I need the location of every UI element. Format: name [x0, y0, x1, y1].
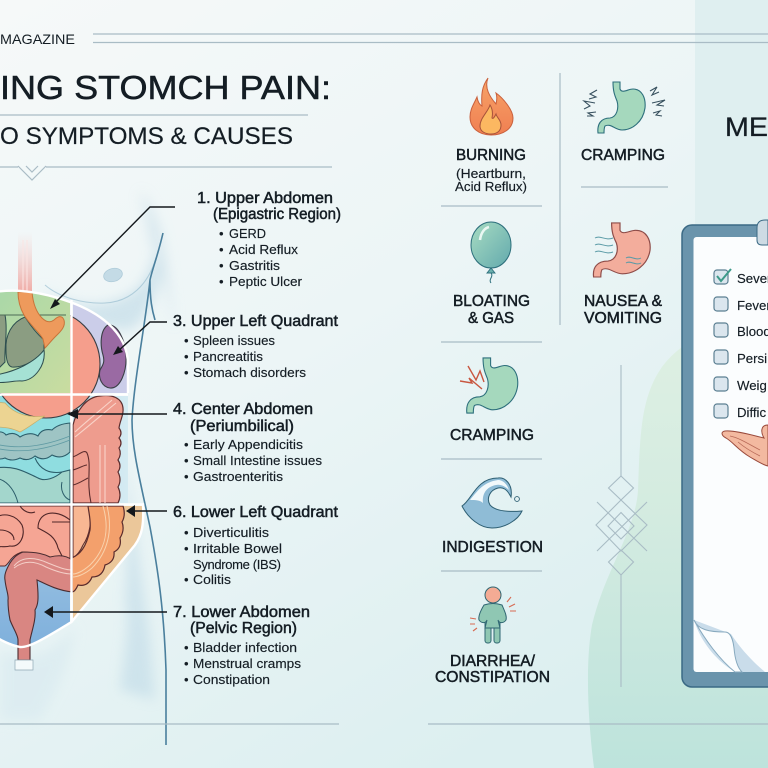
checklist: Weig: [737, 378, 767, 393]
magazine label: MAGAZINE: [0, 31, 75, 47]
symptom: indigestion: INDIGESTION: [442, 539, 543, 556]
green background blob: [588, 320, 768, 768]
callout: center abdomen: [173, 401, 322, 484]
header rule lines: [93, 34, 768, 42]
callout: lower abdomen: Menstrual cramps: [193, 656, 302, 671]
callout: lower abdomen: •: [184, 672, 189, 687]
icon: flame: [470, 78, 513, 135]
callout: lower left quadrant: Colitis: [193, 572, 232, 587]
callout: upper abdomen: •: [219, 226, 224, 241]
icon: red lightning: [460, 366, 484, 389]
icon: stomach teal: [598, 82, 645, 133]
colon center: [73, 396, 123, 503]
callout: lower abdomen: •: [184, 640, 189, 655]
arrow: lower abdomen: [44, 606, 167, 618]
callout: lower left quadrant: 6. Lower Left Quadrant: [173, 504, 339, 521]
callout: lower abdomen: [173, 604, 310, 687]
callout: upper abdomen: (Epigastric Region): [213, 206, 341, 223]
icon: person: [470, 587, 516, 643]
symptom: bloating: [453, 222, 530, 327]
small intestine lower: [0, 506, 70, 566]
arrow: upper left quadrant: [113, 322, 167, 355]
callout: upper abdomen: •: [219, 258, 224, 273]
symptom: bloating: & GAS: [468, 310, 514, 327]
pancreas: [0, 402, 45, 432]
icon: stomach with red spark: [467, 358, 518, 413]
page curl: [694, 620, 765, 672]
callout: center abdomen: Small Intestine issues: [193, 453, 322, 468]
callout: lower abdomen: (Pelvic Region): [190, 620, 297, 637]
heading: medical: ME: [725, 112, 768, 142]
region dividers: [0, 291, 143, 647]
body outline: [132, 233, 166, 745]
icon: stomach pink: [593, 223, 650, 277]
symptom: cramping: CRAMPING: [450, 427, 534, 444]
bladder: [15, 660, 33, 670]
region: center right: [73, 396, 128, 503]
rectum and sigmoid: [5, 552, 72, 660]
icon: pain sparks: [584, 87, 665, 116]
callout: lower abdomen: Bladder infection: [193, 640, 297, 655]
callout: lower abdomen: 7. Lower Abdomen: [173, 604, 310, 621]
nipple: [102, 266, 124, 284]
callout: center abdomen: (Periumbilical): [190, 418, 294, 435]
spleen: [99, 325, 126, 388]
callout: lower abdomen: Constipation: [193, 672, 270, 687]
callout: center abdomen: 4. Center Abdomen: [173, 401, 313, 418]
colon lower: [72, 506, 124, 592]
callout: upper left quadrant: 3. Upper Left Quadrant: [173, 313, 339, 330]
symptom: cramping: [450, 358, 534, 444]
callout: upper abdomen: GERD: [229, 226, 266, 241]
symptom: diarrhea and constipation: DIARRHEA/: [450, 653, 536, 670]
symptom: nausea: [584, 223, 663, 327]
callout: upper left quadrant: •: [184, 365, 189, 380]
checklist: Persi: [737, 351, 767, 366]
arrow: lower left quadrant: [126, 505, 167, 517]
title rule: [0, 114, 308, 116]
checklist: [714, 269, 768, 420]
symptom: indigestion: [442, 478, 543, 556]
callout: upper abdomen: •: [219, 274, 224, 289]
callout: upper left quadrant: •: [184, 333, 189, 348]
callout: center abdomen: •: [184, 469, 189, 484]
symptom: bloating: BLOATING: [453, 293, 530, 310]
callout: lower left quadrant: •: [184, 541, 189, 556]
subtitle: O SYMPTOMS & CAUSES: [0, 123, 293, 150]
callout: upper left quadrant: •: [184, 349, 189, 364]
bottom rules: [0, 723, 768, 725]
callout: lower left quadrant: •: [184, 525, 189, 540]
callout: upper left quadrant: Spleen issues: [193, 333, 275, 348]
callout: center abdomen: •: [184, 437, 189, 452]
callout: upper abdomen: Acid Reflux: [229, 242, 299, 257]
checkmark: [717, 269, 731, 281]
callout: center abdomen: •: [184, 453, 189, 468]
lower esophagus and stomach inlet: [18, 292, 64, 348]
callout: upper abdomen: [197, 190, 341, 289]
arrow: upper abdomen: [50, 207, 175, 309]
callout: lower abdomen: •: [184, 656, 189, 671]
symptom: cramping with sparks: [581, 82, 665, 164]
icon: wave: [462, 478, 522, 528]
symptom: cramping with sparks: CRAMPING: [581, 147, 665, 164]
callout: upper abdomen: Peptic Ulcer: [229, 274, 303, 289]
callout: upper abdomen: Gastritis: [229, 258, 281, 273]
symptom: burning: [455, 78, 527, 194]
clipboard paper: [694, 237, 768, 672]
chest contour: [45, 258, 156, 303]
callout: upper abdomen: •: [219, 242, 224, 257]
callout: upper abdomen: 1. Upper Abdomen: [197, 190, 333, 207]
region: lower abdomen: [0, 506, 70, 647]
callout: center abdomen: Gastroenteritis: [193, 469, 284, 484]
callout: upper left quadrant: Stomach disorders: [193, 365, 307, 380]
symptom dividers: [441, 73, 668, 571]
region: lower left quadrant: [73, 506, 143, 621]
callout: center abdomen: Early Appendicitis: [193, 437, 304, 452]
callout: upper left quadrant: [173, 313, 339, 380]
region: upper left quadrant: [73, 303, 128, 393]
callout: lower left quadrant: Syndrome (IBS): [193, 557, 281, 572]
decorative divider with diamonds: [596, 365, 647, 687]
callout: lower left quadrant: •: [184, 572, 189, 587]
clipboard: [682, 220, 768, 687]
torso shading: [0, 190, 175, 720]
arrow: center abdomen: [67, 409, 167, 419]
liver: [0, 315, 66, 383]
callout: lower left quadrant: Irritable Bowel: [193, 541, 282, 556]
right tinted panel: [695, 0, 768, 768]
symptom: nausea: VOMITING: [584, 310, 662, 327]
small intestine center: [0, 423, 70, 503]
anatomy illustration: [0, 190, 175, 745]
icon: balloon: [471, 222, 511, 283]
checkbox checked: [714, 270, 728, 284]
region: center left: [0, 396, 70, 503]
clipboard clip: [757, 220, 768, 245]
callout: upper left quadrant: Pancreatitis: [193, 349, 264, 364]
symptom: burning: (Heartburn,: [456, 166, 526, 181]
icon: nausea waves: [595, 237, 641, 264]
region: upper abdomen: [0, 291, 70, 393]
clipboard frame: [682, 225, 768, 687]
symptom: diarrhea and constipation: [435, 587, 550, 686]
symptom: burning: Acid Reflux): [455, 179, 527, 194]
symptom: nausea: NAUSEA &: [584, 293, 663, 310]
icon: hand: [722, 425, 768, 466]
checklist: Diffic: [737, 405, 766, 420]
callout: lower left quadrant: [173, 504, 339, 587]
title: ING STOMCH PAIN:: [0, 69, 331, 106]
esophagus: [18, 232, 32, 294]
symptom: burning: BURNING: [456, 147, 526, 164]
callout: lower left quadrant: Diverticulitis: [193, 525, 270, 540]
symptom: diarrhea and constipation: CONSTIPATION: [435, 669, 550, 686]
stomach: [0, 310, 100, 418]
subtitle rule and chevron: [0, 166, 332, 180]
